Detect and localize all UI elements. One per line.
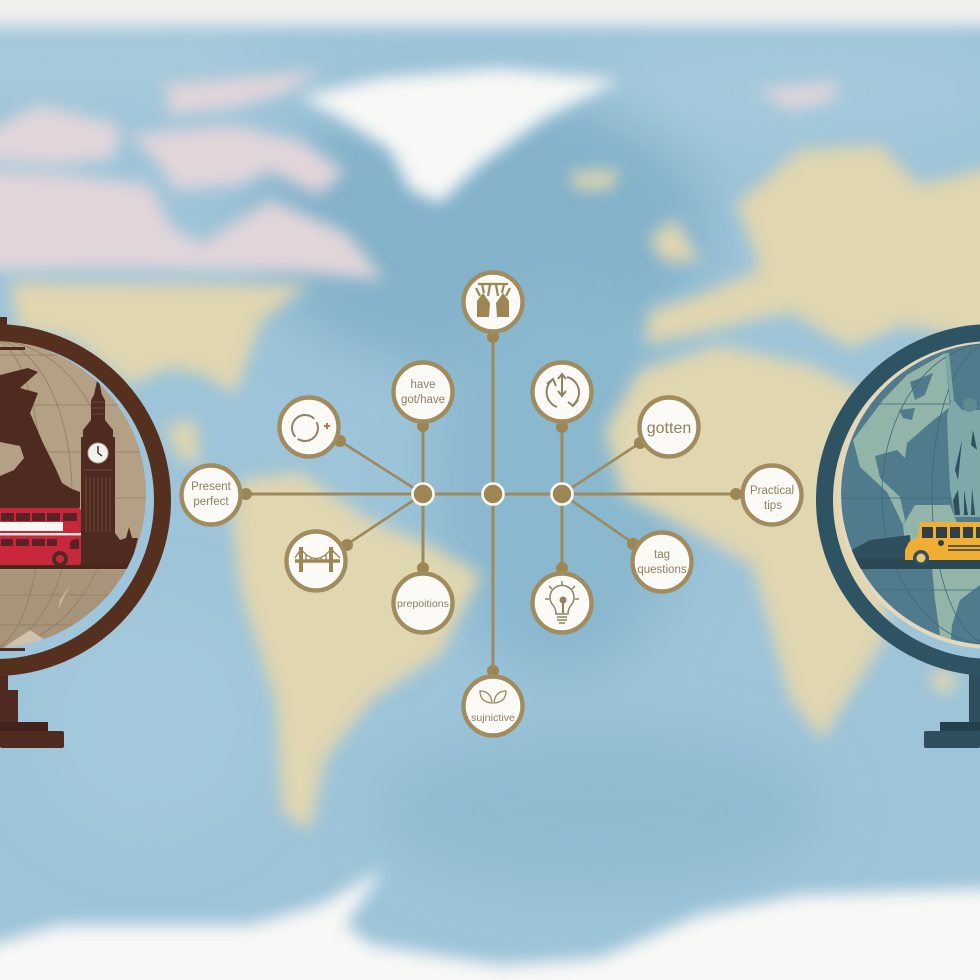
node: subjunctive [464, 665, 522, 736]
hub nodes [412, 484, 572, 504]
node: prepositions [394, 562, 452, 632]
globe disc: UK [0, 341, 146, 648]
globe disc: US [840, 343, 980, 650]
Americas land [853, 353, 950, 525]
node: subjunctive: sujnictive [471, 712, 515, 724]
United Kingdom silhouette [0, 368, 80, 510]
node: have got/have: have [411, 379, 435, 391]
globe ring: US [824, 332, 980, 668]
node: Practical tips: Practical [750, 485, 794, 497]
cream inner ring [837, 339, 980, 649]
node: Present perfect [182, 466, 252, 524]
Statue of Liberty [947, 353, 980, 517]
globe: United Kingdom [0, 317, 162, 748]
node: tag questions [627, 532, 692, 592]
node: cycle arrows icon [532, 362, 592, 433]
node: Practical tips [730, 466, 802, 524]
node: tag questions: questions [637, 564, 687, 576]
hill [848, 535, 912, 568]
node: light bulb icon [532, 562, 592, 632]
yellow school bus [905, 522, 980, 566]
clock face [88, 443, 108, 463]
connector lines [246, 337, 736, 671]
node: Present perfect: Present [191, 481, 232, 493]
node: tag questions: tag [654, 549, 670, 561]
node: Present perfect: perfect [193, 496, 229, 508]
node: have got/have [394, 362, 452, 432]
Big Ben tower [78, 381, 138, 569]
node: prepositions: prepoitions [397, 598, 449, 610]
node: gotten [634, 398, 698, 456]
node: bridge icon [286, 532, 353, 590]
node: have got/have: got/have [401, 394, 445, 406]
globe ring: UK [0, 332, 162, 668]
node: circle icon [280, 398, 346, 456]
stand: US globe [924, 672, 980, 748]
node: hands icon [464, 272, 522, 343]
stand: UK globe [0, 317, 64, 748]
node: Practical tips: tips [764, 500, 782, 512]
node: gotten: gotten [647, 420, 691, 437]
red double-decker bus [0, 508, 130, 569]
globe: United States [824, 332, 980, 748]
